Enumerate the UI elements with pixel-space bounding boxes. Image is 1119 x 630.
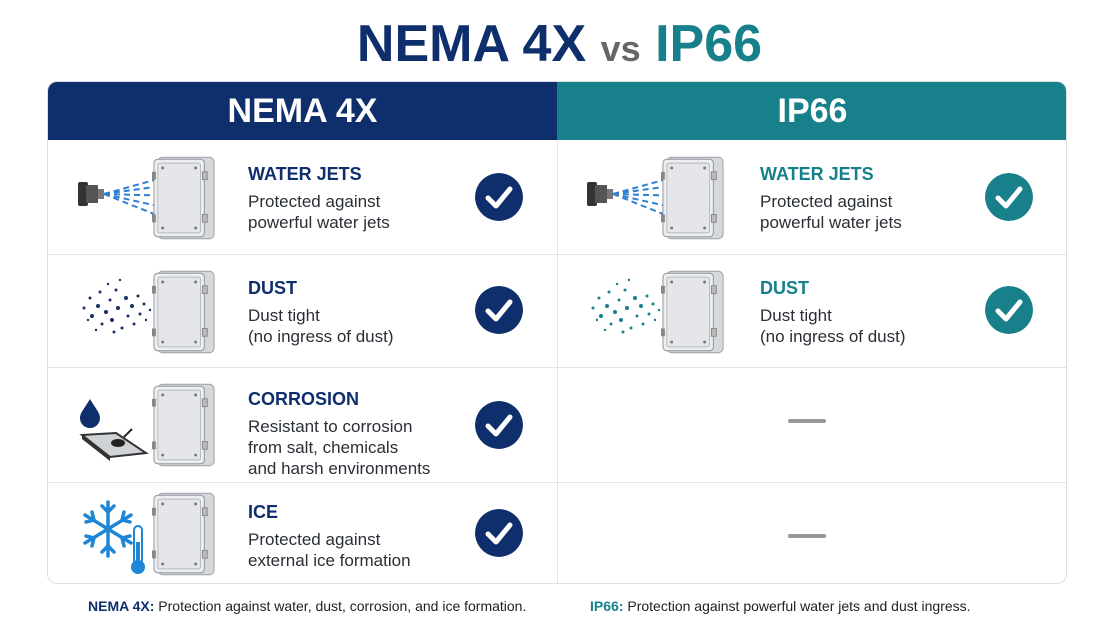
text <box>248 164 390 232</box>
text: Resistant to corrosion <box>248 417 412 436</box>
text: external ice formation <box>248 551 411 570</box>
check icon <box>475 286 523 334</box>
text: Dust tight <box>760 306 832 325</box>
check icon <box>475 401 523 449</box>
text: powerful water jets <box>248 213 390 232</box>
check icon <box>475 173 523 221</box>
text: Dust tight <box>248 306 320 325</box>
check icon <box>475 509 523 557</box>
text: DUST <box>248 278 297 298</box>
text: powerful water jets <box>760 213 902 232</box>
header: IP66 <box>557 82 1068 140</box>
row: corrosion IP66 (not covered) <box>788 419 826 423</box>
header: IP66: IP66 <box>778 92 847 130</box>
text: DUST <box>760 278 809 298</box>
text <box>248 389 430 478</box>
row: ice IP66 (not covered) <box>788 534 826 538</box>
text: and harsh environments <box>248 459 430 478</box>
check icon <box>985 286 1033 334</box>
header: NEMA 4X: NEMA 4X <box>228 92 377 130</box>
row: water jets IP66 <box>587 156 1033 240</box>
text: WATER JETS <box>248 164 362 184</box>
text: ICE <box>248 502 278 522</box>
icon: dust <box>82 270 215 354</box>
check icon <box>985 173 1033 221</box>
icon: water jet <box>587 156 724 240</box>
text: CORROSION <box>248 389 359 409</box>
text: from salt, chemicals <box>248 438 398 457</box>
text: Protected against <box>760 192 892 211</box>
text: Protected against <box>248 192 380 211</box>
comparison table <box>47 81 1067 584</box>
title: NEMA 4X vs IP66 <box>357 15 762 73</box>
header: NEMA 4X <box>48 82 557 140</box>
text <box>248 278 394 346</box>
text <box>248 502 411 570</box>
icon: water jet <box>78 156 215 240</box>
text: (no ingress of dust) <box>248 327 394 346</box>
row: dust IP66 <box>592 270 1033 354</box>
text <box>760 278 906 346</box>
text: Protected against <box>248 530 380 549</box>
text: (no ingress of dust) <box>760 327 906 346</box>
row: ice NEMA <box>83 492 523 576</box>
row: dust NEMA <box>82 270 523 354</box>
icon: dust <box>592 270 724 354</box>
footer note: NEMA 4X: NEMA 4X: Protection against water, dust, corrosion, and ice formation. <box>88 598 526 614</box>
icon: corrosion <box>79 384 215 466</box>
row: water jets NEMA <box>78 156 523 240</box>
text <box>760 164 902 232</box>
footer note: IP66: IP66: Protection against powerful water jets and dust ingress. <box>590 598 971 614</box>
icon: snowflake and thermometer <box>83 492 215 576</box>
row: corrosion NEMA <box>79 384 523 478</box>
text: WATER JETS <box>760 164 874 184</box>
